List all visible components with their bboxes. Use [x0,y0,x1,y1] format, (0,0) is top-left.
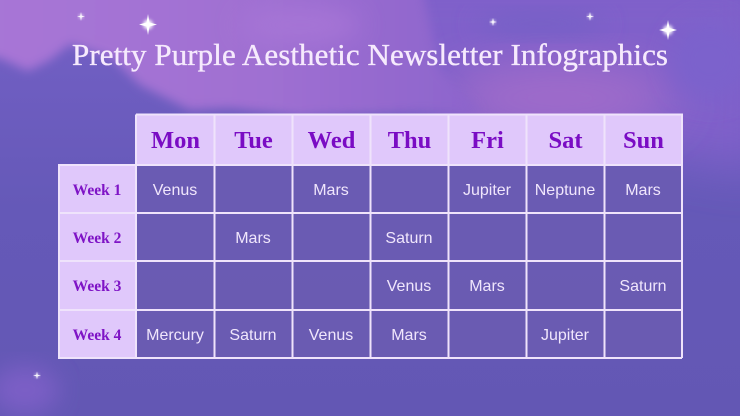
schedule cells: Saturn [619,278,667,295]
schedule cells: Mars [469,278,505,295]
week label column: Week 3 [73,278,122,295]
schedule cells: Jupiter [541,327,590,344]
week label column: Week 4 [73,327,122,344]
star small upper right [586,12,594,21]
week label column: Week 2 [73,230,122,247]
schedule cells: Venus [387,278,431,295]
schedule cells: Saturn [229,327,277,344]
day header row: Wed [308,127,356,154]
day header row: Fri [471,127,504,154]
star large left [139,14,157,35]
title: Pretty Purple Aesthetic Newsletter Infographics [72,37,668,72]
star small centre [489,18,497,26]
schedule cells: Neptune [535,182,595,199]
week label column: Week 1 [73,182,121,199]
schedule cells: Mars [625,182,661,199]
schedule cells: Venus [153,182,197,199]
schedule cells: Mercury [146,327,204,344]
schedule cells: Saturn [385,230,433,247]
star small left [77,12,85,21]
schedule cells: Mars [391,327,427,344]
day header row: Thu [388,127,431,154]
schedule cells: Jupiter [463,182,512,199]
schedule cells [136,165,682,358]
schedule cells: Venus [309,327,353,344]
day header row: Sun [623,127,664,154]
day header row [136,114,682,165]
sparkle stars [33,12,677,380]
star large right [659,20,677,40]
schedule cells: Mars [235,230,271,247]
day header row: Mon [151,127,200,154]
week label column [58,165,136,358]
day header row: Tue [234,127,273,154]
day header row: Sat [548,127,583,154]
star bottom left [33,372,41,380]
schedule cells: Mars [313,182,349,199]
schedule table [58,114,682,358]
